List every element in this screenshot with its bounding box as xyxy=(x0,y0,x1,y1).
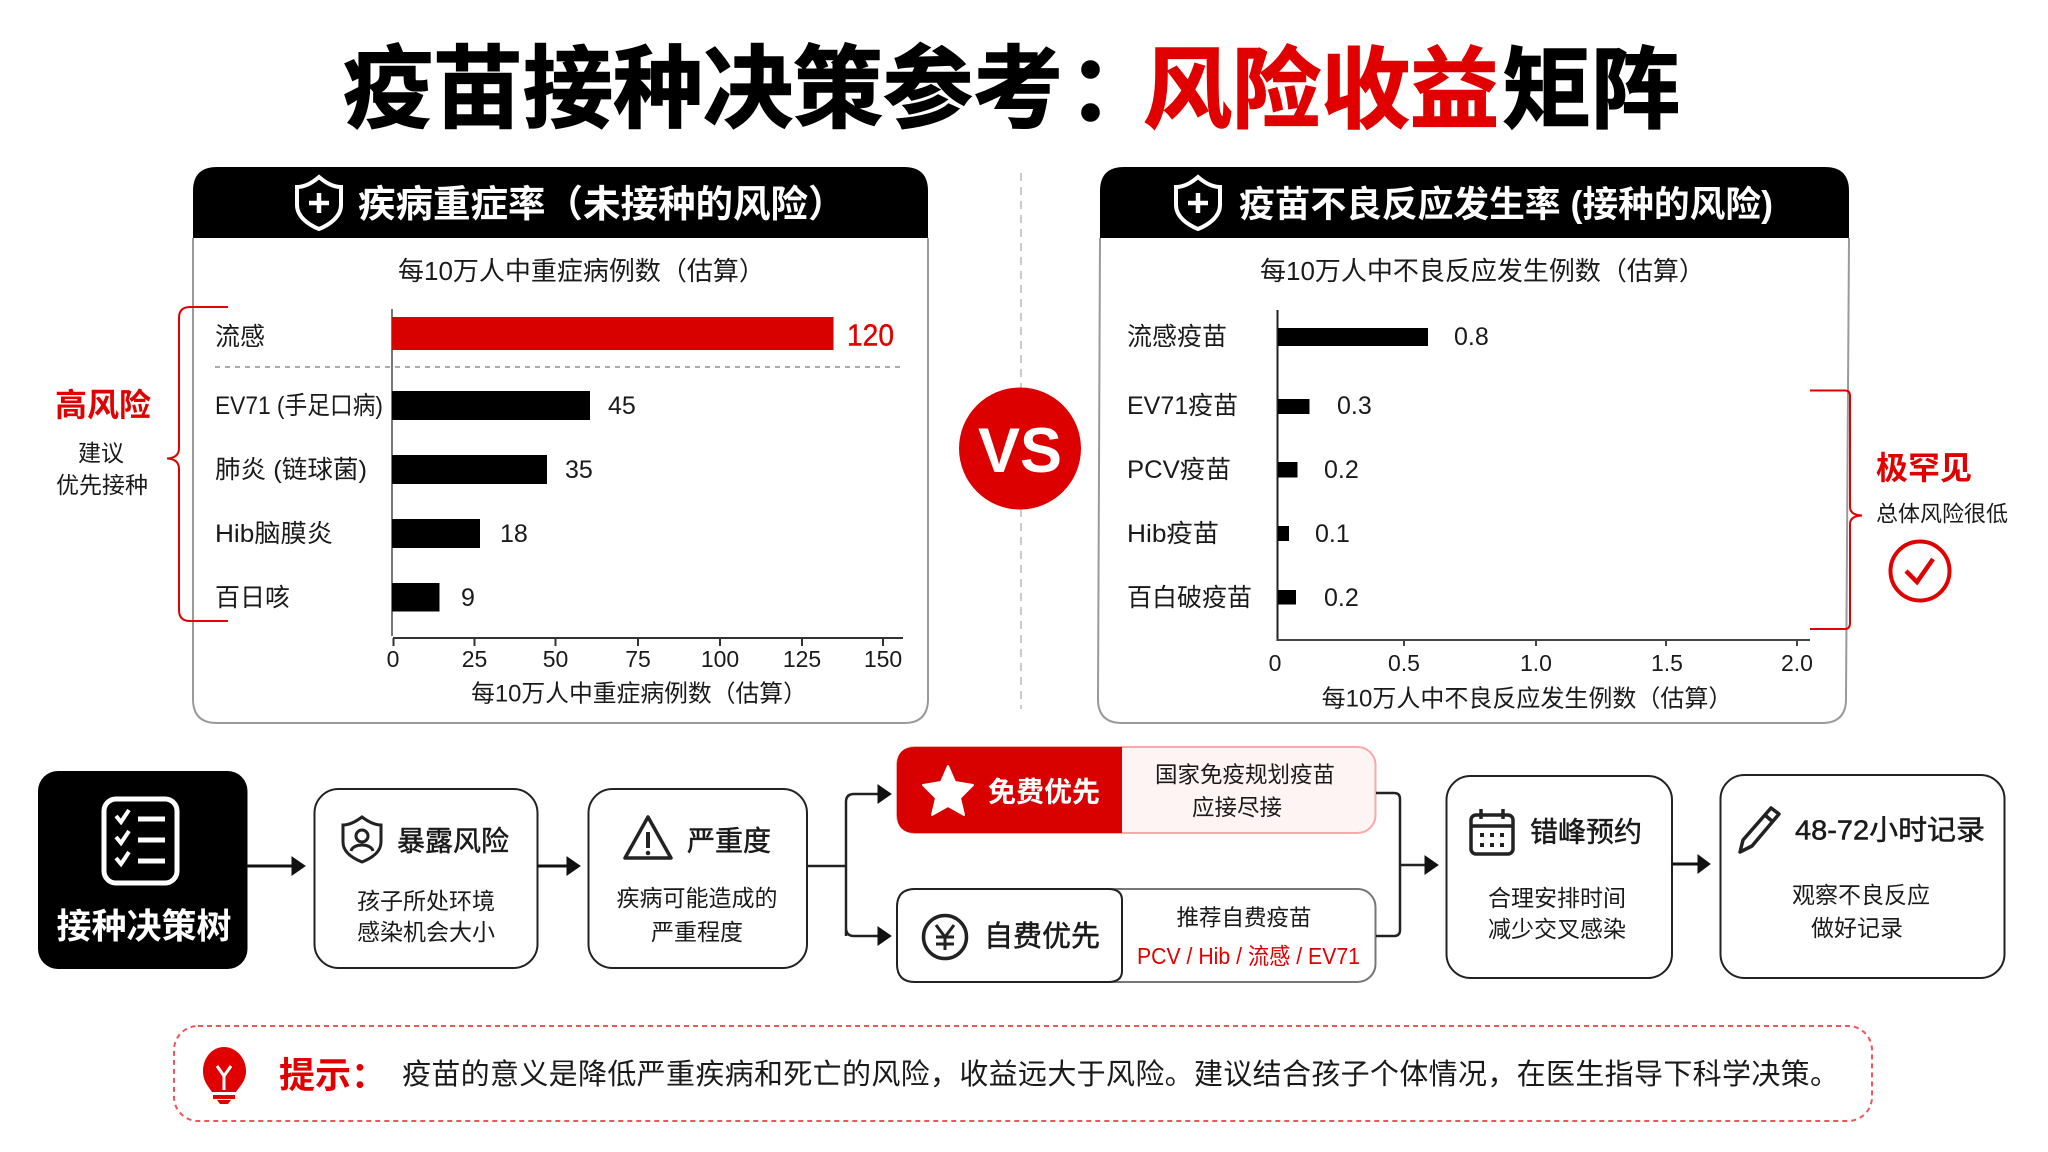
bar: DTaP vaccine xyxy=(1127,584,1359,612)
divider xyxy=(1020,173,1022,709)
icon: yen coin xyxy=(924,916,966,958)
callout: very rare xyxy=(1876,450,2008,600)
icon: pencil xyxy=(1740,808,1779,852)
x axis: disease: 25 xyxy=(462,646,487,672)
icon: check circle xyxy=(1890,542,1950,600)
option: self-paid vaccines: 自费优先 xyxy=(984,920,1100,953)
bar: Hib vaccine xyxy=(1127,520,1350,548)
x axis: disease: 75 xyxy=(625,646,651,672)
bar: PCV vaccine: PCV疫苗 xyxy=(1127,456,1231,484)
bar: pneumonia xyxy=(215,455,593,484)
panel heading: vaccine: 疫苗不良反应发生率 (接种的风险) xyxy=(1239,184,1773,224)
arrow: exposure to severity xyxy=(538,857,580,875)
title: ： xyxy=(1068,40,1158,140)
flow box: exposure risk: 暴露风险 xyxy=(397,826,509,856)
flow box: off-peak appointment: 合理安排时间 xyxy=(1488,885,1626,911)
bar: EV71: 45 xyxy=(608,392,636,420)
bar: EV71: EV71 (手足口病) xyxy=(215,392,383,420)
bar: pertussis: 百日咳 xyxy=(215,584,290,612)
x axis: vaccine: 0 xyxy=(1269,650,1281,676)
bar: Hib vaccine: 0.1 xyxy=(1315,520,1350,548)
bar: EV71 xyxy=(215,391,636,420)
panel: vaccine adverse reactions xyxy=(1098,167,1849,723)
option: free vaccines: 国家免疫规划疫苗 xyxy=(1155,762,1335,788)
tip box: 疫苗的意义是降低严重疾病和死亡的风险，收益远大于风险。建议结合孩子个体情况，在医生指导下科学决策。 xyxy=(402,1058,1839,1091)
flow box: decision tree xyxy=(38,771,248,969)
bar: EV71 vaccine: EV71疫苗 xyxy=(1127,392,1238,420)
flow box: severity: 严重程度 xyxy=(651,919,743,945)
flow box: severity: 严重度 xyxy=(687,826,771,856)
flow box: off-peak appointment: 错峰预约 xyxy=(1530,816,1642,848)
bar: Hib vaccine: Hib疫苗 xyxy=(1127,520,1219,548)
panel heading: disease: 疾病重症率（未接种的风险） xyxy=(358,183,846,225)
x axis: vaccine: 2.0 xyxy=(1781,650,1813,676)
VS badge: VS xyxy=(978,416,1062,486)
bar: pertussis xyxy=(215,583,475,612)
callout: very rare: 总体风险很低 xyxy=(1876,502,2008,526)
bar: flu vaccine: 0.8 xyxy=(1454,323,1489,351)
x axis: disease: 50 xyxy=(543,646,568,672)
bar: DTaP vaccine: 0.2 xyxy=(1324,584,1359,612)
callout: very rare: 极罕见 xyxy=(1876,450,1972,486)
flow box: severity xyxy=(588,789,807,968)
option: self-paid vaccines: 推荐自费疫苗 xyxy=(1176,906,1312,930)
bar: flu vaccine: 流感疫苗 xyxy=(1127,323,1227,351)
flow box: 48-72h record xyxy=(1720,775,2004,978)
icon: calendar xyxy=(1471,809,1513,854)
x axis title: vaccine: 每10万人中不良反应发生例数（估算） xyxy=(1322,686,1732,712)
x axis: disease: 0 xyxy=(387,646,399,672)
panel header: vaccine xyxy=(1100,167,1849,238)
icon: warning xyxy=(625,817,671,858)
bar: Hib meningitis: Hib脑膜炎 xyxy=(215,520,333,548)
bar chart: disease severe cases xyxy=(215,309,903,708)
arrow: tree to exposure xyxy=(247,857,305,875)
icon: light bulb xyxy=(203,1047,246,1104)
bar: pneumonia: 35 xyxy=(565,456,593,484)
x axis title: disease: 每10万人中重症病例数（估算） xyxy=(471,680,807,708)
high-risk brace xyxy=(167,307,228,621)
tip box: 提示： xyxy=(279,1054,387,1096)
flow box: 48-72h record: 做好记录 xyxy=(1811,915,1903,941)
option: free vaccines xyxy=(897,747,1376,833)
bar: flu vaccine xyxy=(1127,323,1489,351)
panel: disease severe rate xyxy=(193,167,928,723)
title xyxy=(343,40,1680,140)
flow box heading: 接种决策树 xyxy=(56,908,232,946)
icon: star xyxy=(923,766,973,815)
bar: DTaP vaccine: 百白破疫苗 xyxy=(1127,584,1252,612)
chart subtitle: vaccine: 每10万人中不良反应发生例数（估算） xyxy=(1260,256,1705,286)
flow box: severity: 疾病可能造成的 xyxy=(616,885,778,911)
icon: checklist xyxy=(104,799,177,883)
bar: EV71 vaccine: 0.3 xyxy=(1337,392,1372,420)
VS badge xyxy=(959,388,1081,510)
flow box: exposure risk xyxy=(314,789,538,968)
very-rare brace xyxy=(1810,390,1862,629)
title: 疫苗接种决策参考 xyxy=(343,40,1063,140)
title: 矩阵 xyxy=(1502,40,1680,140)
tip box xyxy=(174,1026,1872,1121)
arrow: scheduling to record xyxy=(1672,855,1710,873)
option: free vaccines: 免费优先 xyxy=(988,776,1100,808)
chart subtitle: disease: 每10万人中重症病例数（估算） xyxy=(398,256,765,286)
x axis: vaccine: 1.0 xyxy=(1520,650,1552,676)
bar: influenza: 流感 xyxy=(215,323,265,351)
bar: EV71 vaccine xyxy=(1127,392,1372,420)
flow box: off-peak appointment xyxy=(1446,776,1672,978)
bar: pneumonia: 肺炎 (链球菌) xyxy=(215,456,367,484)
bar: Hib meningitis xyxy=(215,519,528,548)
x axis: vaccine: 1.5 xyxy=(1651,650,1683,676)
bar chart: vaccine adverse cases xyxy=(1127,310,1813,712)
title: 风险收益 xyxy=(1143,40,1499,140)
x axis: disease: 100 xyxy=(701,646,739,672)
flow box: exposure risk: 孩子所处环境 xyxy=(357,888,495,914)
arrows: merge to scheduling xyxy=(1376,793,1438,936)
x axis: disease: 150 xyxy=(864,646,902,672)
flow box: 48-72h record: 观察不良反应 xyxy=(1792,882,1930,908)
x axis: disease: 125 xyxy=(783,646,821,672)
callout: high risk: 优先接种 xyxy=(56,472,148,498)
icon: shield plus xyxy=(297,177,341,229)
panel header: disease xyxy=(193,167,928,238)
icon: shield person xyxy=(343,817,381,862)
option: self-paid vaccines xyxy=(897,889,1376,982)
flow box: exposure risk: 感染机会大小 xyxy=(357,919,495,945)
flow box: 48-72h record: 48-72小时记录 xyxy=(1795,814,1985,846)
icon: shield plus xyxy=(1176,177,1220,229)
callout: high risk xyxy=(55,387,151,498)
bar: PCV vaccine xyxy=(1127,456,1359,484)
bar: PCV vaccine: 0.2 xyxy=(1324,456,1359,484)
callout: high risk: 建议 xyxy=(78,440,124,466)
x axis: disease xyxy=(387,638,903,672)
bar: influenza: 120 xyxy=(847,318,894,352)
x axis: vaccine: 0.5 xyxy=(1388,650,1420,676)
bar: pertussis: 9 xyxy=(461,584,475,612)
x axis: vaccine xyxy=(1269,640,1813,676)
option: free vaccines: 应接尽接 xyxy=(1192,796,1282,820)
callout: high risk: 高风险 xyxy=(55,387,151,423)
bar: influenza xyxy=(215,317,894,352)
arrows: branch to priorities xyxy=(807,785,891,945)
option: self-paid vaccines: PCV / Hib / 流感 / EV71 xyxy=(1137,943,1360,969)
flow box: off-peak appointment: 减少交叉感染 xyxy=(1488,916,1626,942)
bar: Hib meningitis: 18 xyxy=(500,520,528,548)
